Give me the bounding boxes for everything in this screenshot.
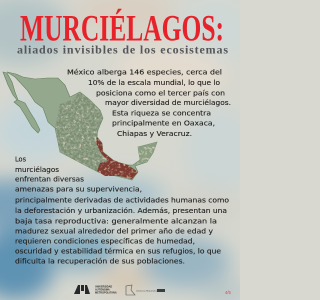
intro text block: Chiapas y Veracruz. bbox=[117, 130, 192, 138]
infographic canvas bbox=[0, 0, 240, 300]
watercolor background bbox=[0, 0, 255, 300]
central highland mottling bbox=[55, 92, 138, 180]
threats text block: oscuridad y estabilidad térmica en sus refugios, lo que bbox=[15, 248, 221, 256]
threats text block: Los bbox=[15, 156, 27, 164]
threats text block: baja tasa reproductiva: generalmente alcanzan la bbox=[15, 218, 217, 226]
university name: AUTÓNOMA bbox=[95, 288, 110, 292]
intro text block: posiciona como el tercer país con bbox=[96, 90, 225, 98]
Baja California peninsula bbox=[3, 72, 40, 133]
map of Mexico bbox=[3, 72, 160, 183]
threats text block: madurez sexual alrededor del primer año de edad y bbox=[15, 228, 213, 236]
Yucatan mottling bbox=[136, 142, 157, 164]
threats text block: murciélagos bbox=[15, 166, 60, 174]
threats text block: principalmente derivadas de actividades humanas como bbox=[15, 196, 229, 204]
university name: METROPOLITANA bbox=[95, 292, 117, 294]
partner name: Ciencias Naturales bbox=[136, 290, 158, 292]
threats text block: requieren condiciones específicas de humedad, bbox=[15, 238, 195, 246]
intro text block: México alberga 146 especies, cerca del bbox=[67, 68, 222, 76]
icon: partner emblem bbox=[126, 285, 135, 295]
high diversity region: Oaxaca, Chiapas, Veracruz bbox=[96, 137, 138, 179]
threats text block: amenazas para su supervivencia, bbox=[15, 186, 142, 194]
footer logos bbox=[74, 285, 165, 295]
intro text block: Esta riqueza se concentra bbox=[112, 110, 211, 118]
mainland Mexico bbox=[7, 72, 157, 180]
partner mark bbox=[157, 289, 165, 292]
threats text block: dificulta la recuperación de sus poblaciones. bbox=[15, 258, 185, 266]
icon: UAM logo bbox=[74, 285, 90, 294]
subtitle: aliados invisibles de los ecosistemas bbox=[17, 42, 228, 56]
intro text block: 10% de la escala mundial, lo que lo bbox=[88, 79, 220, 87]
page number: 4/5 bbox=[225, 290, 231, 295]
intro text block bbox=[67, 68, 231, 138]
intro text block: mayor diversidad de murciélagos. bbox=[105, 99, 231, 107]
threats text block: la deforestación y urbanización. Además, presentan una bbox=[15, 207, 227, 215]
threats text block: enfrentan diversas bbox=[15, 176, 85, 184]
threats text block bbox=[15, 156, 229, 266]
university name: UNIVERSIDAD bbox=[95, 286, 112, 288]
intro text block: principalmente en Oaxaca, bbox=[112, 120, 215, 128]
